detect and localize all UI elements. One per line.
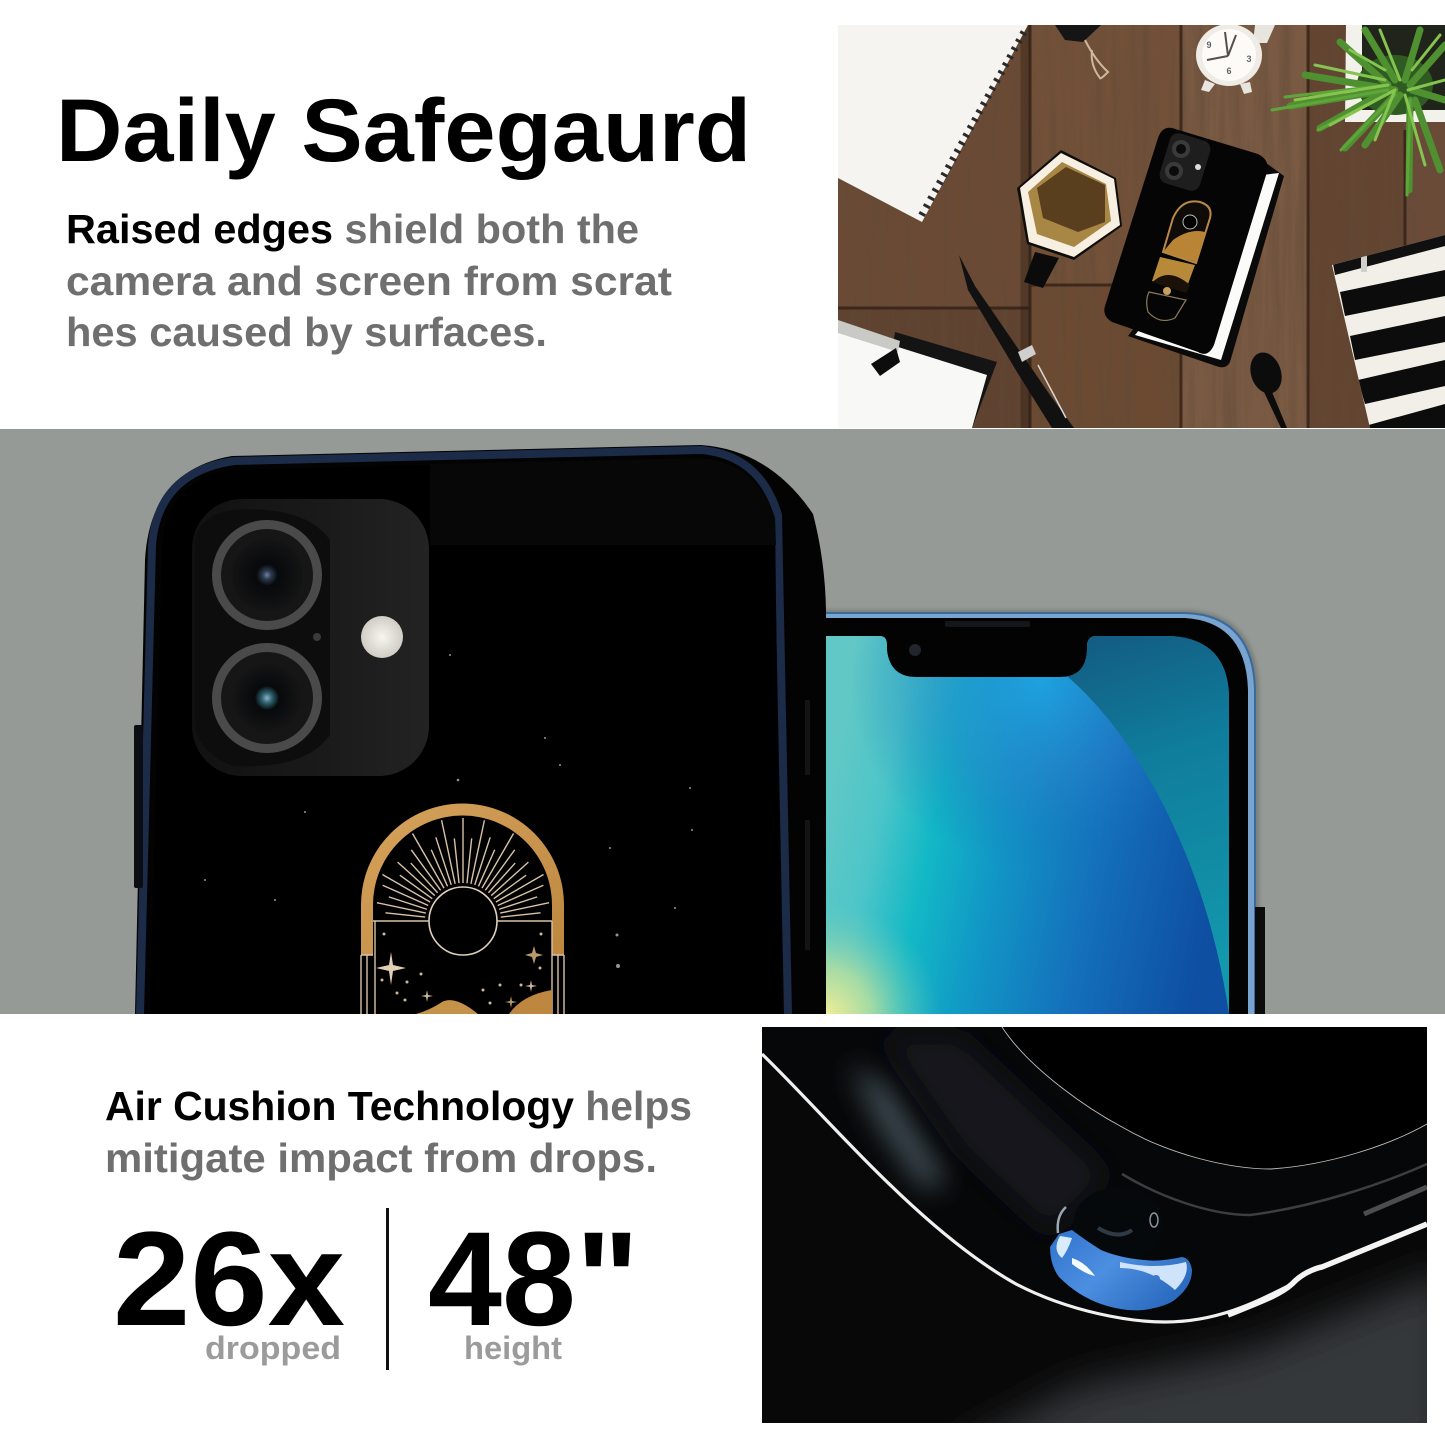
text block: air cushion: Air Cushion Technology helps <box>105 1083 692 1129</box>
stat: 26x dropped: dropped <box>205 1330 341 1366</box>
coffee cup <box>1017 150 1122 288</box>
droplet <box>1050 1187 1192 1310</box>
mini camera island <box>1160 133 1210 191</box>
camera island <box>192 499 429 776</box>
mini artwork <box>1147 201 1211 320</box>
phone on desk <box>1104 128 1284 367</box>
upper black cutout <box>1002 1027 1427 1169</box>
alarm clock: 9 <box>1206 40 1212 50</box>
pen <box>959 255 1074 428</box>
phones <box>134 445 1265 1014</box>
text block: raised edges: camera and screen from scrat <box>66 258 672 304</box>
alarm clock <box>1196 24 1275 94</box>
text block: raised edges: hes caused by surfaces. <box>66 309 547 355</box>
plant <box>1272 25 1445 195</box>
stat divider <box>386 1208 389 1370</box>
text block: air cushion <box>105 1083 692 1181</box>
front of phone with blue frame <box>826 608 1265 1014</box>
thin inner edge line <box>1002 1027 1427 1169</box>
grey band <box>0 429 1445 1014</box>
stat: 26x dropped: 26x <box>113 1205 345 1354</box>
photo: air cushion corner with droplet <box>762 1027 1445 1445</box>
clipboard <box>838 320 997 428</box>
text block: raised edges <box>66 206 672 355</box>
tiny stars <box>204 654 693 968</box>
wallpaper dark region <box>1060 630 1235 1014</box>
large rear case <box>134 445 826 1014</box>
text block: raised edges: Raised edges shield both the <box>66 206 639 252</box>
band highlight <box>850 1065 945 1190</box>
speaker <box>945 621 1030 627</box>
stat: 48 inches height: 48" <box>428 1205 639 1354</box>
black spoon <box>1250 352 1287 428</box>
stars <box>376 952 406 985</box>
striped notebook <box>1330 230 1445 430</box>
screen <box>826 636 1229 1014</box>
gold arch artwork <box>361 804 564 1014</box>
text block: air cushion: mitigate impact from drops. <box>105 1135 657 1181</box>
stat: 48 inches height: height <box>464 1330 562 1366</box>
photo: phone case on wooden desk <box>838 24 1445 430</box>
alarm clock: 6 <box>1226 66 1232 76</box>
dunes <box>416 1000 478 1014</box>
notch camera <box>909 644 921 656</box>
floor glow <box>971 1262 1427 1423</box>
inner rim lines <box>1122 1164 1427 1215</box>
title: Daily Safegaurd <box>56 80 751 180</box>
alarm clock: 3 <box>1246 54 1252 64</box>
case band <box>762 1027 1427 1322</box>
notebook <box>838 25 1028 222</box>
white rim <box>762 1054 1292 1322</box>
binder clip <box>1055 25 1108 78</box>
